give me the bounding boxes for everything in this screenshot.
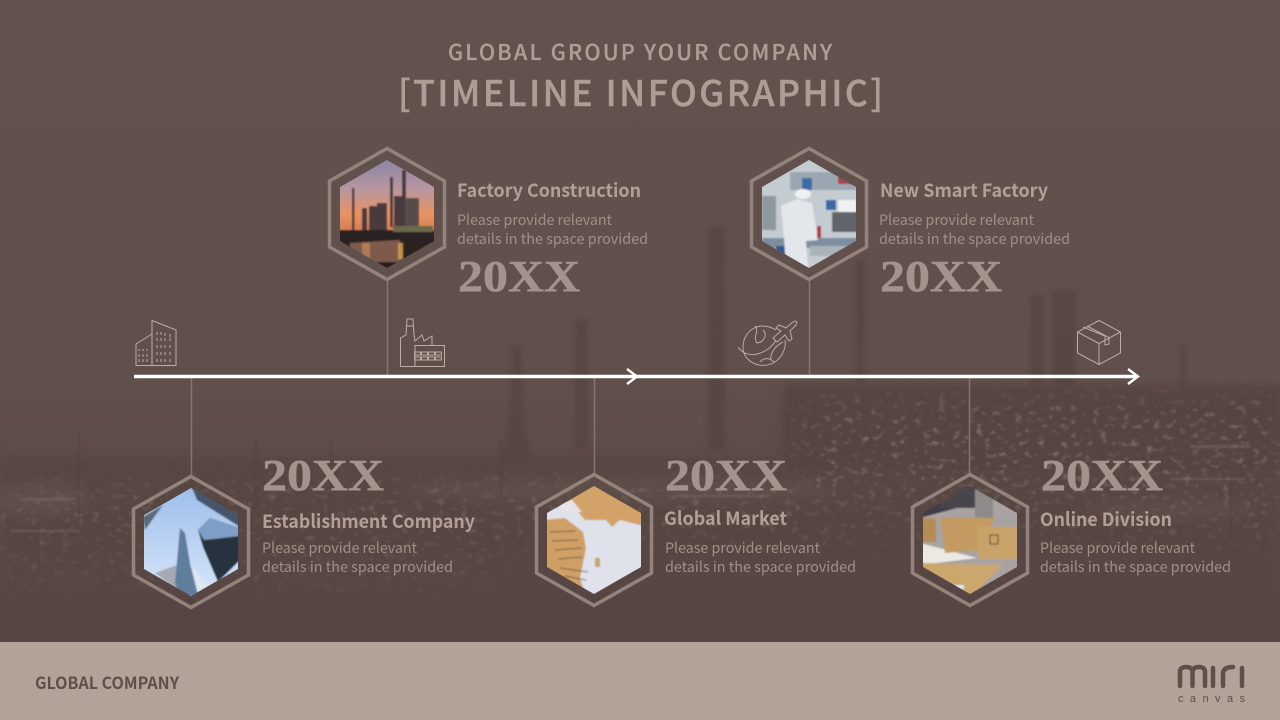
photo: power plant at sunset bbox=[340, 160, 434, 268]
logo mark bbox=[1180, 667, 1242, 686]
icon: globe and plane bbox=[738, 321, 797, 365]
timeline arrow bbox=[134, 369, 1138, 384]
panel: New Smart Factory: details in the space provided bbox=[879, 228, 1070, 249]
footer band bbox=[0, 642, 1280, 720]
title: main heading: [TIMELINE INFOGRAPHIC] bbox=[398, 66, 883, 117]
heading: Online Division bbox=[1040, 506, 1172, 532]
background factory silhouette bbox=[2, 228, 1280, 573]
description: Please provide relevant bbox=[262, 537, 418, 558]
icon: office building bbox=[136, 320, 176, 366]
panel: Factory Construction bbox=[330, 148, 648, 301]
photo: skyscrapers bbox=[144, 488, 238, 596]
panel: Factory Construction: details in the space provided bbox=[457, 228, 648, 249]
photo: world map bbox=[547, 486, 641, 594]
heading: Factory Construction bbox=[457, 177, 641, 203]
description: Please provide relevant bbox=[1040, 537, 1196, 558]
heading: New Smart Factory bbox=[880, 177, 1048, 203]
hexagon frame bbox=[752, 148, 866, 280]
year: 20XX bbox=[1041, 451, 1163, 500]
photo: factory worker bbox=[762, 160, 856, 268]
logo: miri canvas bbox=[1178, 667, 1246, 705]
hexagon frame bbox=[536, 474, 652, 606]
panel: Establishment Company: details in the space provided bbox=[262, 556, 453, 577]
year: 20XX bbox=[880, 252, 1002, 301]
description: Please provide relevant bbox=[879, 209, 1035, 230]
panel: Global Market bbox=[536, 451, 856, 606]
heading: Global Market bbox=[664, 505, 787, 531]
icon: factory bbox=[400, 319, 444, 366]
panel: Global Market: details in the space provided bbox=[665, 556, 856, 577]
logo wordmark: canvas bbox=[1178, 693, 1246, 705]
hexagon frame bbox=[912, 474, 1028, 606]
description: Please provide relevant bbox=[665, 537, 821, 558]
year: 20XX bbox=[458, 252, 580, 301]
panel: Establishment Company bbox=[134, 451, 475, 608]
panel: Online Division: details in the space provided bbox=[1040, 556, 1231, 577]
hexagon frame bbox=[134, 476, 248, 608]
hexagon frame bbox=[330, 148, 444, 280]
footer label: GLOBAL COMPANY bbox=[35, 670, 179, 694]
connector lines bbox=[192, 281, 970, 475]
panel: Online Division bbox=[912, 451, 1231, 606]
heading: Establishment Company bbox=[262, 508, 475, 534]
title: company line: GLOBAL GROUP YOUR COMPANY bbox=[448, 36, 832, 67]
panel: New Smart Factory bbox=[752, 148, 1070, 301]
description: Please provide relevant bbox=[457, 209, 613, 230]
photo: cardboard boxes bbox=[923, 486, 1017, 594]
icon: parcel box bbox=[1078, 320, 1120, 364]
year: 20XX bbox=[262, 451, 384, 500]
year: 20XX bbox=[665, 451, 787, 500]
title block bbox=[398, 36, 883, 117]
